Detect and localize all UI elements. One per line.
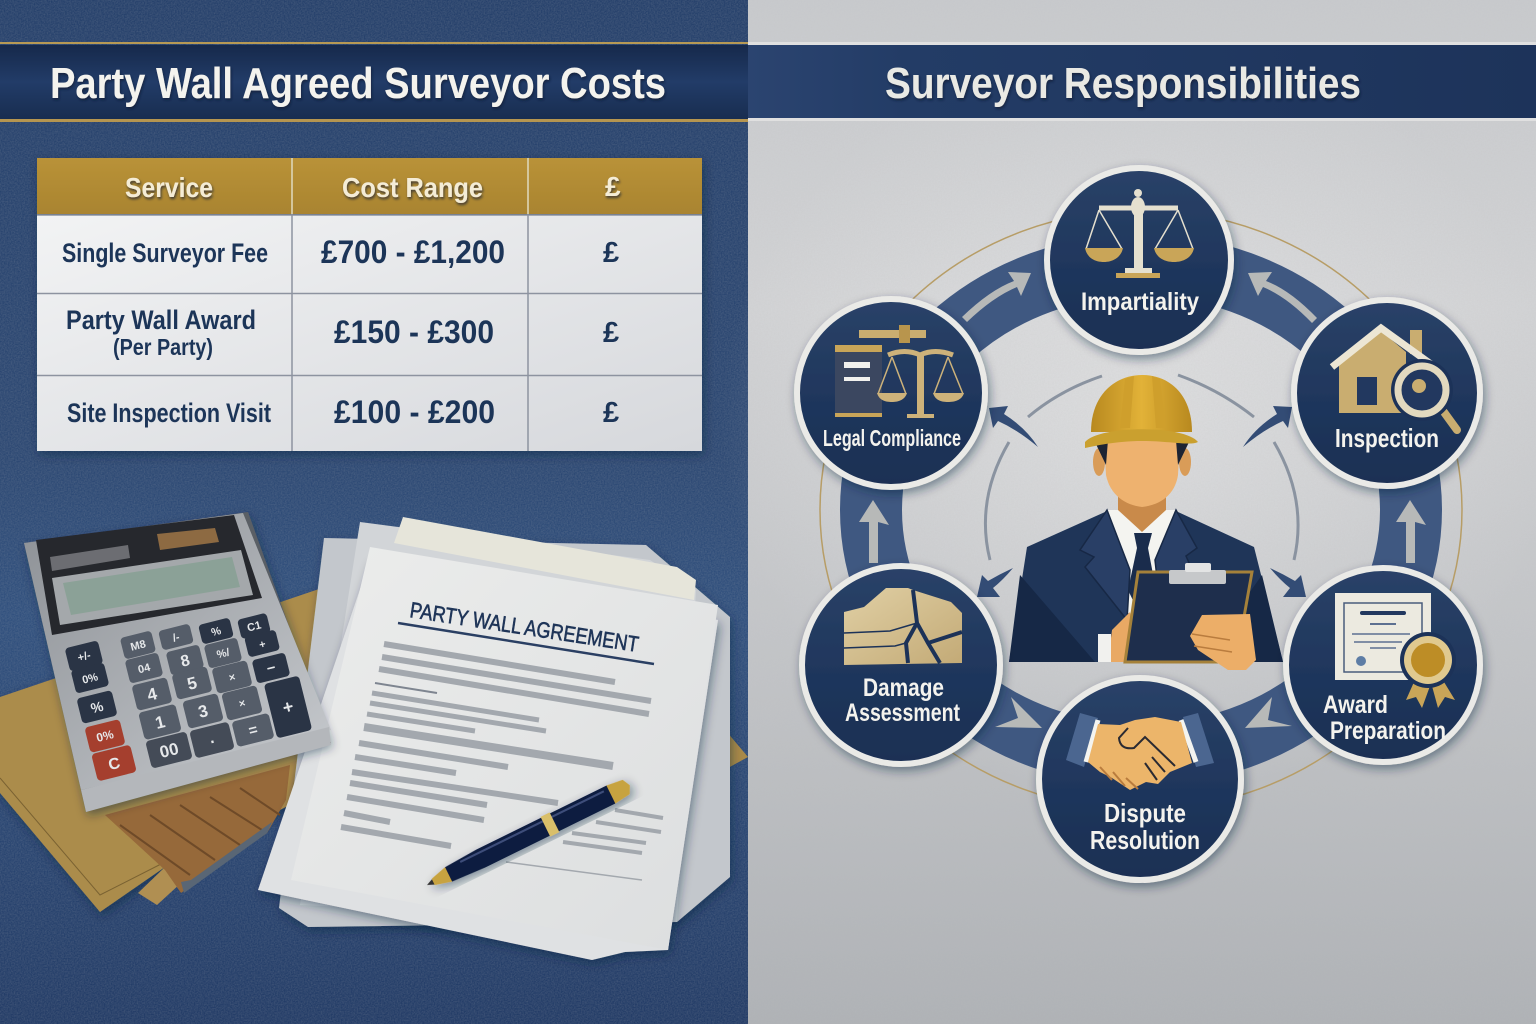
table header row: Service (125, 172, 213, 203)
row: single surveyor fee: £ (603, 237, 619, 269)
label: damage assessment (845, 674, 961, 727)
lapels (1080, 510, 1130, 620)
shirt and tie (1107, 510, 1176, 640)
paper stack (258, 517, 730, 960)
row: site inspection visit: Site Inspection Visit (67, 398, 271, 428)
right header band (748, 42, 1536, 121)
label: dispute resolution (1090, 798, 1200, 855)
node: impartiality (1047, 168, 1231, 352)
hard hat (1085, 375, 1198, 448)
node: dispute resolution (1039, 678, 1241, 880)
calculator keys: − (265, 659, 278, 678)
row: party wall award: Party Wall Award (66, 305, 256, 335)
gold outer ring (820, 210, 1462, 810)
label: legal compliance: Legal Compliance (823, 425, 961, 451)
icon: handshake (1066, 713, 1214, 790)
calculator keys: 1 (153, 712, 167, 733)
left hand (1108, 612, 1140, 662)
surveyor figure (1009, 375, 1283, 670)
calculator keys: 0% (81, 671, 100, 687)
calculator keys: C1 (246, 619, 263, 634)
icon: certificate with seal (1335, 593, 1456, 708)
node: damage assessment (802, 566, 1000, 764)
calculator keys: 3 (196, 701, 210, 722)
calculator keys: M8 (129, 638, 147, 654)
light cycle arrows (859, 272, 1426, 728)
icon: cracked wall (844, 588, 962, 665)
label: award preparation (1323, 691, 1446, 745)
inner thin arcs (985, 375, 1298, 560)
node: legal compliance (797, 299, 985, 487)
agreement page (291, 547, 718, 950)
pen (422, 775, 635, 895)
calculator keys: 8 (179, 652, 192, 671)
calculator keys: 00 (158, 739, 181, 762)
label: dispute resolution: Resolution (1090, 825, 1200, 855)
calculator keys: % (210, 625, 223, 639)
calculator keys: . (207, 730, 216, 747)
row: party wall award: £ (603, 317, 619, 349)
label: impartiality: Impartiality (1081, 288, 1199, 316)
left title: Party Wall Agreed Surveyor Costs (50, 59, 666, 108)
calculator keys: = (247, 721, 260, 740)
left header band (0, 42, 748, 122)
icon: house and magnifier (1332, 328, 1457, 430)
blue cycle band (871, 265, 1411, 755)
right hand (1190, 614, 1256, 670)
calculator keys: +/- (76, 649, 92, 664)
row: party wall award: (Per Party) (113, 334, 213, 360)
row: site inspection visit: £ (603, 397, 619, 429)
suit (1009, 512, 1283, 662)
agreement body text lines (341, 644, 663, 880)
folders under the calculator (0, 588, 748, 912)
calculator keys: %/ (216, 647, 231, 661)
calculator keys: 4 (145, 684, 160, 705)
icon: balance scales (1085, 189, 1194, 278)
calculator keys: × (238, 697, 247, 711)
calculator keys: C (107, 755, 122, 774)
right title: Surveyor Responsibilities (885, 59, 1361, 108)
neck and face (1118, 485, 1166, 532)
node: award preparation (1286, 568, 1480, 762)
calculator keys: 5 (185, 673, 199, 694)
label: damage assessment: Damage (863, 674, 944, 702)
label: damage assessment: Assessment (845, 699, 961, 727)
calculator keys: % (89, 698, 106, 716)
calculator tabs (50, 545, 130, 571)
inner dark arrows (977, 406, 1306, 597)
agreement heading: PARTY WALL AGREEMENT (408, 597, 640, 657)
calculator keys: × (228, 671, 237, 685)
node: inspection (1294, 300, 1480, 486)
calculator (24, 512, 331, 812)
row: site inspection visit (67, 394, 619, 430)
table header row: Cost Range (342, 172, 483, 203)
calculator keys: + (258, 638, 267, 652)
label: inspection: Inspection (1335, 423, 1439, 453)
table header row (125, 171, 621, 203)
row: single surveyor fee: Single Surveyor Fee (62, 238, 268, 268)
calculator keys: /- (172, 631, 181, 645)
clipboard (1125, 563, 1252, 662)
calculator keys: 04 (137, 661, 152, 676)
table header row: £ (605, 171, 621, 202)
label: dispute resolution: Dispute (1104, 798, 1186, 828)
row: site inspection visit: £100 - £200 (334, 394, 495, 430)
label: award preparation: Award (1323, 691, 1388, 719)
calculator display (63, 557, 240, 615)
row: party wall award: £150 - £300 (334, 314, 494, 350)
cost table (37, 158, 702, 451)
calculator keys (65, 613, 312, 781)
label: award preparation: Preparation (1330, 717, 1446, 745)
calculator keys: + (280, 696, 296, 718)
right panel: responsibilities (720, 0, 1536, 1024)
left panel: costs (0, 0, 748, 1024)
row: single surveyor fee: £700 - £1,200 (321, 234, 505, 270)
calculator keys: 0% (95, 727, 115, 745)
row: single surveyor fee (62, 234, 619, 270)
icon: book, gavel and scales (835, 325, 964, 418)
row: party wall award (66, 305, 619, 360)
